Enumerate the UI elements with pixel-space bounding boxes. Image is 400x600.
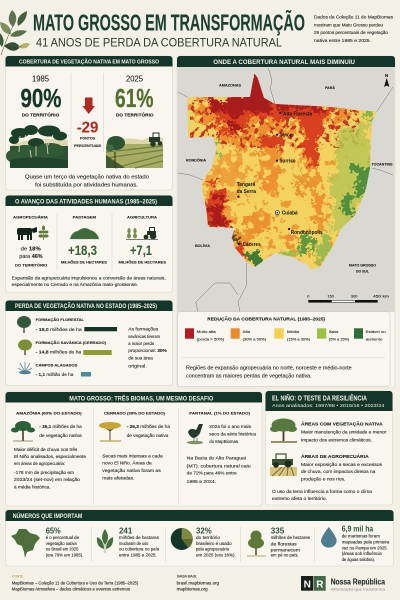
neighbour labels bbox=[186, 84, 393, 274]
stat: Brazil 65%: vegetação nativa bbox=[46, 541, 77, 546]
block: native vegetation areas: impacto dos extremos climáticos. bbox=[301, 437, 372, 442]
2025 statistic: DO TERRITÓRIO bbox=[116, 111, 154, 119]
legend: low: (5% a 15%) bbox=[329, 337, 350, 342]
stat: Brazil 65%: 65% bbox=[46, 525, 61, 535]
row: flooded fields: CAMPOS ALAGADOS bbox=[36, 364, 78, 368]
panel header: numbers bbox=[6, 510, 394, 521]
legend panel bbox=[178, 312, 390, 387]
stat: 335 million hectares: em pé no país. bbox=[271, 553, 299, 558]
neighbouring borders bbox=[178, 68, 393, 312]
panel header: vegetation cover bbox=[6, 56, 172, 66]
stat: 32% farming: brasileiro é usado bbox=[196, 541, 232, 546]
stat: 241 million hectares: milhões de hectares bbox=[119, 535, 160, 540]
block: farming areas: Maior exposição a secas e excessos bbox=[301, 462, 383, 467]
legend: stable: aumento bbox=[366, 337, 383, 342]
column: Amazônia: 2023/24 (set-nov) em relação bbox=[14, 477, 80, 482]
column: Pantanal: de 72% para 46% entre bbox=[187, 471, 237, 476]
neighbour labels: BOLÍVIA bbox=[195, 243, 210, 248]
logo: Nossa República bbox=[301, 576, 386, 591]
column: Pantanal: 1985 e 2024. bbox=[187, 479, 216, 484]
panel header: native vegetation loss: PERDA DE VEGETAÇÃO NATIVA NO ESTADO (1985–2025) bbox=[15, 303, 157, 310]
icon: leaves decoration bbox=[0, 10, 30, 55]
text: savanna note bbox=[128, 327, 167, 368]
column: agricultura: AGRICULTURA bbox=[127, 215, 157, 219]
legend: stable bbox=[354, 328, 386, 342]
block: native vegetation areas: ÁREAS COM VEGETAÇÃO NATIVA bbox=[301, 421, 383, 428]
stat: Brazil 65%: no Brasil em 2025 bbox=[46, 546, 79, 552]
footer: learn more: brasil.mapbiomas.org bbox=[177, 580, 220, 585]
panel: numbers that matter bbox=[6, 510, 394, 566]
stat: 241 million hectares: entre 1985 e 2025. bbox=[119, 553, 157, 558]
text: land use note: extremo afeta o território. bbox=[272, 496, 327, 501]
column: Pantanal bbox=[187, 411, 256, 484]
icon: water drop bbox=[321, 527, 337, 548]
neighbour labels: DO SUL bbox=[356, 270, 370, 274]
stat: Brazil 65% bbox=[11, 525, 83, 558]
icon: water plant bbox=[18, 362, 32, 374]
stat: 6,9 mil ha: 6,9 mil ha bbox=[342, 524, 374, 534]
icon: north arrow: N bbox=[385, 73, 388, 78]
column: agricultura: +7,1 bbox=[130, 242, 152, 258]
column: Cerrado: - 26,3 milhões de ha bbox=[127, 424, 170, 429]
icon: tractor on field bbox=[270, 454, 297, 476]
column: Amazônia: - 35,1 milhões de ha bbox=[39, 424, 82, 429]
column: pastagem: PASTAGEM bbox=[73, 215, 96, 219]
logo: Nossa República: R bbox=[316, 580, 324, 590]
2025 statistic: 2025 bbox=[126, 75, 144, 84]
stat: 241 million hectares: ou cobertura no país bbox=[119, 546, 160, 552]
scale bar: 450 km bbox=[373, 294, 389, 298]
column: agricultura bbox=[118, 215, 166, 264]
text: savanna note: de sua área bbox=[128, 355, 153, 360]
legend: high: (30% a 50%) bbox=[243, 337, 267, 342]
stat: 335 million hectares: de florestas bbox=[271, 542, 297, 547]
text: savanna note: a maior perda bbox=[128, 341, 154, 346]
panel header: El Niño: Anos analisados: 1997/98 • 2015/16 • 2023/24 bbox=[272, 403, 385, 408]
intro text: mostram que Mato Grosso perdeu bbox=[314, 22, 383, 27]
column: Cerrado: Secas mais intensas a cada bbox=[102, 453, 163, 458]
column: Pantanal: (MT): cobertura natural caiu bbox=[187, 463, 251, 468]
stat: 6,9 mil ha: vez no Pampa em 2025 bbox=[342, 545, 387, 550]
column: Cerrado: de vegetação nativa bbox=[127, 433, 169, 438]
column: Cerrado: vegetação nativa foram as bbox=[102, 468, 161, 473]
panel header: vegetation cover: COBERTURA DE VEGETAÇÃO NATIVA EM MATO GROSSO bbox=[19, 59, 159, 66]
icon: crops and tractor bbox=[126, 227, 158, 240]
stat: 335 million hectares: permanecem bbox=[271, 547, 300, 552]
column: Amazônia: -178 mm de precipitação em bbox=[14, 470, 74, 475]
column: Amazônia bbox=[11, 410, 86, 490]
neighbour labels: PARÁ bbox=[325, 85, 335, 90]
legend: very high bbox=[185, 328, 225, 342]
column: agropecuária: DO TERRITÓRIO bbox=[15, 263, 47, 268]
panel header: human activities: O AVANÇO DAS ATIVIDADES HUMANAS (1985–2025) bbox=[15, 200, 157, 206]
city labels: Sinop bbox=[280, 133, 292, 139]
2025 statistic: 61% bbox=[115, 83, 154, 113]
caption: foi substituída por atividades humanas. bbox=[35, 182, 138, 188]
decline value: -29 bbox=[77, 119, 98, 136]
icon: grass bbox=[70, 228, 99, 239]
icon: tree bbox=[17, 316, 31, 333]
arrow: decline bbox=[82, 98, 95, 114]
panel: human activities bbox=[6, 196, 172, 292]
stat: 32% farming: pela agropecuária bbox=[196, 546, 229, 552]
text: map note bbox=[186, 365, 352, 379]
2025 statistic bbox=[115, 75, 154, 119]
column: Amazônia: Maior déficit de chuva nos três bbox=[14, 447, 78, 452]
stat: 241 million hectares: mudaram de uso bbox=[119, 541, 149, 546]
row: forest formation: FORMAÇÃO FLORESTAL bbox=[36, 317, 85, 322]
column: pastagem: +18,3 bbox=[68, 242, 97, 258]
legend: high: Alta bbox=[243, 329, 251, 334]
icon: acacia bbox=[99, 422, 121, 441]
neighbour labels: MATO GROSSO bbox=[349, 264, 376, 268]
logo: Nossa República: N bbox=[304, 580, 311, 590]
chart: pie bbox=[171, 528, 193, 550]
icon: wheat bbox=[38, 226, 49, 240]
text: expansion note: especialmente no Cerrado e na Amazônia mato-grossense. bbox=[12, 282, 138, 287]
caption: Quase um terço da vegetação nativa do estado bbox=[25, 174, 149, 180]
footer: learn more: SAIBA MAIS: bbox=[177, 574, 197, 579]
decline value: PONTOS bbox=[80, 136, 95, 140]
stat: 335 million hectares bbox=[247, 525, 311, 558]
intro text: nativa entre 1985 e 2025. bbox=[314, 38, 371, 43]
legend: medium bbox=[274, 328, 311, 342]
stat: Brazil 65%: (era 79% em 1985). bbox=[46, 553, 83, 558]
decline value bbox=[74, 119, 101, 148]
text: savanna note: savânicas tiveram bbox=[128, 334, 160, 339]
stat: 241 million hectares: 241 bbox=[119, 525, 133, 535]
intro text bbox=[314, 14, 394, 43]
icon: north arrow bbox=[384, 73, 389, 87]
column: Pantanal: Na Bacia do Alto Paraguai bbox=[187, 455, 246, 460]
footer: learn more: mapbiomas.org bbox=[177, 586, 208, 591]
column: Pantanal: seco da série histórica bbox=[209, 432, 256, 437]
block: native vegetation areas bbox=[270, 418, 387, 442]
text: expansion note: Expansão da agropecuária impulsionou a conversão de áreas naturais, bbox=[12, 275, 166, 280]
legend: stable: Estável ou bbox=[366, 329, 386, 334]
legend: medium: Média bbox=[287, 329, 300, 334]
neighbour labels: RONDÔNIA bbox=[186, 158, 206, 162]
column: Pantanal: do MapBiomas. bbox=[209, 439, 239, 444]
stat: Brazil 65%: é o percentual de bbox=[46, 535, 79, 540]
icon: bird bbox=[187, 424, 203, 444]
map: Mato Grosso loss choropleth bbox=[180, 70, 380, 275]
text: map note: Regiões de expansão agropecuária no norte, noroeste e médio-norte bbox=[186, 365, 352, 371]
neighbour labels: AMAZONAS bbox=[219, 84, 241, 88]
footer: sources: MapBiomas – Coleção 11 de Cobertura e Uso da Terra (1985–2025) bbox=[12, 580, 139, 585]
legend: high bbox=[231, 328, 267, 342]
column: agropecuária: para 46% bbox=[19, 254, 43, 260]
scale bar: 0 bbox=[307, 294, 309, 298]
row: forest formation bbox=[17, 316, 117, 333]
block: farming areas: de chuva, com impactos diretos na bbox=[301, 469, 376, 474]
stat: 6,9 mil ha: (áreas sob influência bbox=[342, 551, 382, 556]
scale bar: 300 bbox=[351, 294, 357, 298]
city labels: da Serra bbox=[237, 189, 256, 195]
column: Amazônia: El Niño analisados, especialmente bbox=[14, 454, 86, 459]
decline value: PERCENTUAIS bbox=[74, 144, 101, 148]
stat: 335 million hectares: 335 bbox=[271, 525, 285, 535]
panel header: human activities bbox=[6, 196, 172, 206]
icon: cow bbox=[17, 227, 37, 240]
footer: sources: MapBiomas Atmosfera – dados climáticos e eventos extremos bbox=[12, 586, 130, 591]
city labels: Alta Floresta bbox=[283, 112, 312, 118]
legend: low bbox=[317, 328, 350, 342]
panel: native vegetation loss bbox=[6, 300, 172, 386]
text: land use note bbox=[272, 489, 372, 501]
text: savanna note: As formações bbox=[128, 327, 159, 332]
block: farming areas: ÁREAS DE AGROPECUÁRIA bbox=[301, 453, 369, 460]
intro text: Dados da Coleção 11 do MapBiomas bbox=[314, 14, 394, 20]
block: native vegetation areas: Maior manutenção da umidade e menor bbox=[301, 430, 387, 435]
panel header: biomes bbox=[6, 392, 262, 403]
legend: medium: (15% a 30%) bbox=[287, 337, 311, 342]
panel: biomes bbox=[6, 392, 262, 506]
column: Cerrado: novo El Niño. Áreas de bbox=[102, 460, 152, 466]
city labels: Tangará bbox=[237, 182, 255, 188]
scale bar: 150 bbox=[328, 294, 334, 298]
column: Pantanal: PANTANAL (1% DO ESTADO) bbox=[189, 411, 251, 415]
illustration: forest 1985 bbox=[6, 125, 68, 168]
caption bbox=[25, 174, 149, 188]
column: pastagem: MILHÕES DE HECTARES bbox=[61, 259, 107, 264]
legend: very high: Muito alta bbox=[197, 329, 217, 334]
stat: 32% farming bbox=[171, 525, 236, 558]
1985 statistic bbox=[20, 75, 62, 119]
row: flooded fields bbox=[18, 362, 91, 377]
text: expansion note bbox=[12, 275, 166, 287]
stat: 32% farming: do território bbox=[196, 535, 220, 540]
city labels: Cuiabá bbox=[282, 210, 298, 216]
column: Amazônia: de vegetação nativa bbox=[39, 433, 82, 438]
stat: 6,9 mil ha: de marismas foram bbox=[342, 533, 380, 538]
footer: sources bbox=[12, 575, 139, 591]
row: savanna formation bbox=[18, 340, 112, 355]
panel header: numbers: NÚMEROS QUE IMPORTAM bbox=[13, 511, 82, 520]
text: savanna note: proporcional: 30% bbox=[128, 348, 167, 353]
row: savanna formation: FORMAÇÃO SAVÂNICA (CERRADO) bbox=[36, 340, 107, 345]
column: Cerrado bbox=[99, 411, 170, 481]
column: Amazônia: AMAZÔNIA (60% DO ESTADO) bbox=[16, 410, 83, 415]
subtitle: 41 ANOS DE PERDA DA COBERTURA NATURAL bbox=[36, 38, 283, 50]
footer: learn more bbox=[177, 574, 220, 591]
panel: vegetation cover bbox=[6, 56, 172, 190]
icon: tree on soil bbox=[270, 418, 297, 442]
panel: El Niño bbox=[266, 391, 392, 505]
icon: savanna tree bbox=[18, 340, 32, 355]
city labels bbox=[237, 112, 323, 248]
legend: very high: (perda > 50%) bbox=[197, 337, 225, 342]
panel header: El Niño: EL NIÑO: O TESTE DA RESILIÊNCIA bbox=[272, 394, 367, 402]
block: farming areas: produção e nos rios. bbox=[301, 477, 345, 482]
icon: tree bbox=[247, 530, 266, 556]
column: Cerrado: CERRADO (39% DO ESTADO) bbox=[104, 411, 166, 415]
text: savanna note: original. bbox=[128, 363, 147, 368]
column: Pantanal: 2024 foi o ano mais bbox=[209, 424, 252, 429]
column: pastagem bbox=[61, 215, 107, 264]
scale bar bbox=[307, 294, 389, 303]
city labels: Rondonópolis bbox=[291, 230, 323, 236]
legend title: REDUÇÃO DA COBERTURA NATURAL (1985–2025) bbox=[207, 316, 325, 323]
column: agropecuária: AGROPECUÁRIA bbox=[13, 214, 48, 219]
icon: leaf bbox=[97, 529, 113, 553]
column: Amazônia: à média histórica. bbox=[14, 485, 51, 490]
neighbour labels: TOCANTINS bbox=[372, 162, 393, 166]
row: forest formation: - 19,0 milhões de ha bbox=[36, 327, 82, 332]
1985 statistic: 90% bbox=[20, 83, 62, 113]
stat: 32% farming: em 2025 (era 16%). bbox=[196, 553, 236, 558]
panel header: native vegetation loss bbox=[6, 300, 172, 311]
row: savanna formation: - 14,8 milhões de ha bbox=[36, 349, 82, 354]
icon: rainforest tree bbox=[11, 421, 35, 441]
column: agropecuária: de 18% bbox=[21, 247, 41, 253]
text: map note: concentram as maiores perdas de vegetação nativa. bbox=[186, 373, 312, 379]
stat: 32% farming: 32% bbox=[196, 525, 212, 535]
icon: Brazil map bbox=[11, 529, 40, 558]
text: land use note: O uso da terra influencia a forma como o clima bbox=[272, 489, 372, 494]
stat: 6,9 mil ha: de águas salobra). bbox=[342, 557, 375, 562]
city labels: Cáceres bbox=[243, 242, 261, 248]
stat: 6,9 mil ha bbox=[321, 524, 390, 562]
block: farming areas bbox=[270, 453, 383, 482]
stat: 335 million hectares: milhões de hectares bbox=[271, 535, 311, 540]
panel header: map: ONDE A COBERTURA NATURAL MAIS DIMINUIU bbox=[213, 60, 355, 66]
logo: Nossa República: informação que transforma bbox=[331, 587, 386, 591]
panel header: biomes: MATO GROSSO: TRÊS BIOMAS, UM MESMO DESAFIO bbox=[69, 394, 213, 403]
stat: 6,9 mil ha: mapeadas pela primeira bbox=[342, 540, 390, 545]
column: agricultura: MILHÕES DE HECTARES bbox=[118, 259, 166, 264]
1985 statistic: 1985 bbox=[32, 75, 50, 84]
column: Cerrado: mais afetadas. bbox=[102, 476, 134, 481]
city labels: Sorriso bbox=[280, 159, 296, 165]
1985 statistic: DO TERRITÓRIO bbox=[22, 111, 60, 119]
stat: 241 million hectares bbox=[97, 525, 160, 558]
illustration: farmland 2025 bbox=[106, 133, 163, 168]
column: agropecuária bbox=[13, 214, 49, 268]
row: flooded fields: - 1,1 milhão de ha bbox=[36, 372, 74, 377]
panel header: El Niño bbox=[266, 391, 392, 411]
panel header: map bbox=[177, 56, 395, 67]
footer: sources: FONTE bbox=[12, 575, 24, 579]
logo: Nossa República: Nossa República bbox=[331, 578, 385, 587]
intro text: 29 pontos percentuais de vegetação bbox=[314, 30, 388, 35]
column: Amazônia: em áreas de agropecuária: bbox=[14, 461, 65, 466]
legend: low: Baixa bbox=[329, 329, 339, 334]
